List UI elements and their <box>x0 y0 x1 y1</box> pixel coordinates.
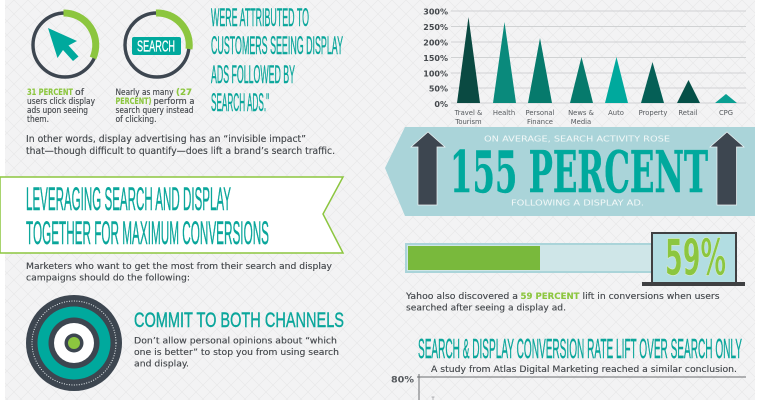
banner: 155 percent: ON AVERAGE, SEARCH ACTIVITY ROSE <box>484 134 670 144</box>
text: CUSTOMERS SEEING DISPLAY <box>211 32 343 60</box>
heading: quote end <box>211 4 343 117</box>
chart: conversion lift axis: 80% <box>391 376 415 386</box>
progress bar: 59 percent <box>406 244 656 272</box>
text: 27 percent search <box>116 88 194 125</box>
bar chart: search lift by category: Travel & <box>454 109 483 117</box>
text: 27 percent search: perform a <box>154 97 194 107</box>
bar chart: search lift by category: 50% <box>429 84 448 94</box>
bar chart: search lift by category: Auto <box>608 109 624 117</box>
icon: cursor ring <box>33 13 97 77</box>
icon: search ring <box>125 13 189 77</box>
banner: leveraging search and display <box>0 177 343 253</box>
bar chart: search lift by category: 0% <box>434 100 448 109</box>
text: commit description <box>134 336 339 370</box>
text: 27 percent search: (27 <box>176 88 192 98</box>
bar chart: search lift by category <box>423 8 746 126</box>
bar chart: search lift by category: 300% <box>423 8 448 16</box>
text: invisible impact <box>26 134 335 157</box>
icon: search ring: SEARCH <box>137 38 175 56</box>
bar chart: search lift by category: Property <box>639 109 667 117</box>
text: marketers intro: Marketers who want to get the most from their search and display <box>26 262 332 272</box>
bar chart: search lift by category: Finance <box>527 118 553 126</box>
bar chart: search lift by category: 100% <box>423 70 448 78</box>
heading: quote end: ADS FOLLOWED BY <box>211 61 295 89</box>
text: atlas study: A study from Atlas Digital Marketing reached a similar conclusion. <box>431 365 737 375</box>
text: 31 percent click: them. <box>27 115 49 125</box>
icon: left up arrow <box>411 132 445 205</box>
bar chart: search lift by category: 250% <box>423 23 448 32</box>
text: 31 percent click: users click display <box>27 97 95 107</box>
text: yahoo 59 percent <box>405 292 720 314</box>
text: marketers intro: campaigns should do the following: <box>26 274 190 284</box>
text: 27 percent search: of clicking. <box>116 115 156 125</box>
text: invisible impact: that—though difficult to quantify—does lift a brand’s search traffic. <box>26 146 335 157</box>
text: invisible impact: In other words, display advertising has an “invisible impact” <box>26 134 306 145</box>
text: WERE ATTRIBUTED TO <box>211 4 309 32</box>
banner: 155 percent <box>385 127 755 216</box>
text: 31 percent click: of <box>75 88 85 98</box>
banner: leveraging search and display: LEVERAGING SEARCH AND DISPLAY <box>26 181 231 217</box>
bar chart: search lift by category: 200% <box>423 38 448 48</box>
heading: quote end: SEARCH ADS." <box>211 89 269 117</box>
icon: laptop with 59% <box>642 229 745 287</box>
chart: conversion lift axis <box>391 374 746 400</box>
bar chart: search lift by category: News & <box>568 109 595 117</box>
text: commit description: and display. <box>134 360 189 370</box>
heading: commit to both channels: COMMIT TO BOTH CHANNELS <box>134 309 344 332</box>
bar chart: search lift by category: 150% <box>423 54 448 63</box>
icon: right up arrow <box>710 132 744 205</box>
icon: target <box>26 295 122 391</box>
text: yahoo 59 percent: lift in conversions when users <box>582 292 720 302</box>
banner: 155 percent: FOLLOWING A DISPLAY AD. <box>511 198 644 208</box>
bar chart: search lift by category: Media <box>571 118 591 126</box>
text: 31 percent click: 31 PERCENT <box>27 88 73 98</box>
bar chart: search lift by category: Personal <box>526 109 555 117</box>
text: 27 percent search: Nearly as many <box>116 88 174 98</box>
text: yahoo 59 percent: Yahoo also discovered a <box>405 292 518 302</box>
bar chart: search lift by category: Health <box>493 109 515 117</box>
text: TOGETHER FOR MAXIMUM CONVERSIONS <box>26 215 269 251</box>
text: 31 percent click: ads upon seeing <box>27 106 88 116</box>
text: yahoo 59 percent: 59 PERCENT <box>520 292 580 302</box>
text: 27 percent search: PERCENT) <box>116 97 152 107</box>
bar chart: search lift by category: Tourism <box>454 118 482 126</box>
bar chart: search lift by category: CPG <box>719 109 733 117</box>
bar chart: search lift by category: Retail <box>678 109 698 117</box>
text: commit description: Don’t allow personal opinions about “which <box>134 336 337 346</box>
text: commit description: one is better” to stop you from using search <box>134 348 339 358</box>
text: 27 percent search: search query instead <box>116 106 194 116</box>
text: yahoo 59 percent: searched after seeing a display ad. <box>406 304 566 314</box>
text: 31 percent click <box>27 88 95 125</box>
text: marketers intro <box>26 262 332 284</box>
